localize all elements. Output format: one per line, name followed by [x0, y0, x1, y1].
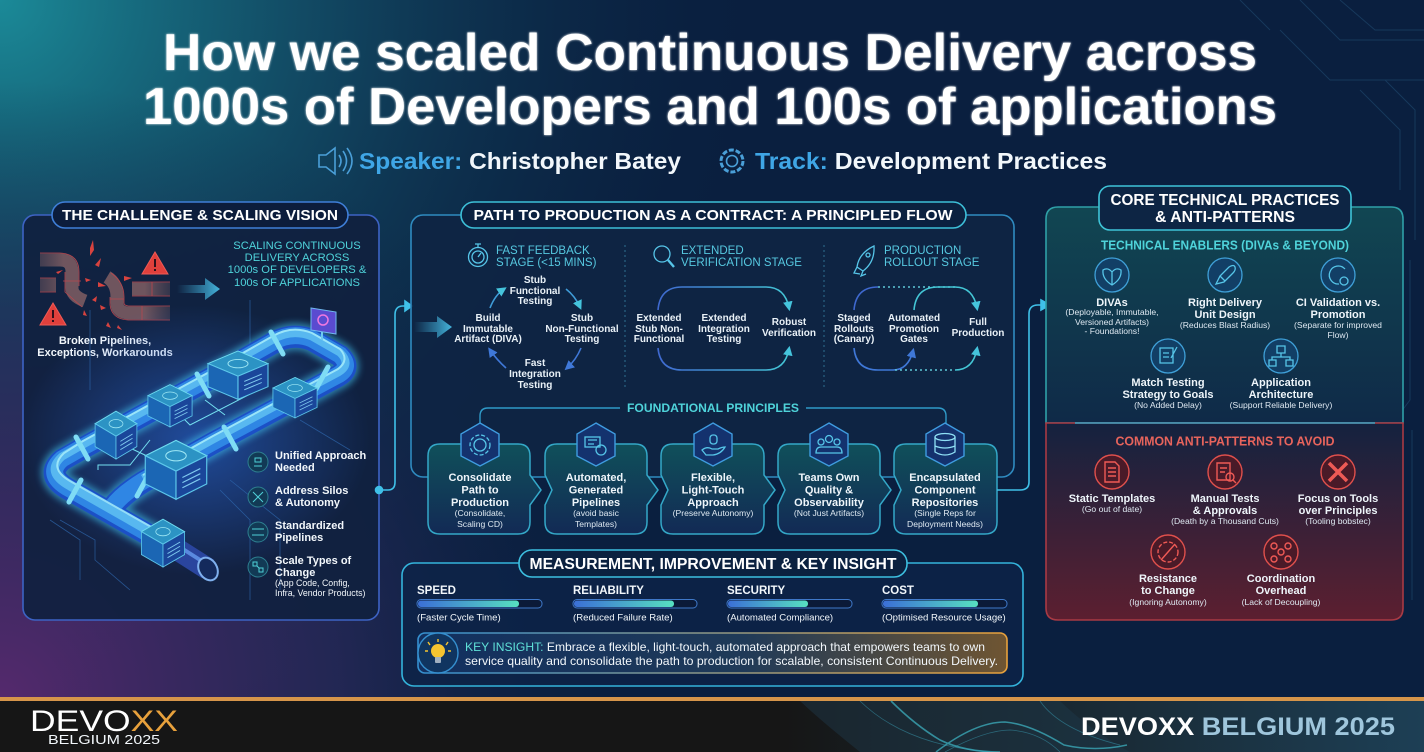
- foundational principles heading: FOUNDATIONAL PRINCIPLES: [627, 401, 799, 415]
- nodes: Build: [476, 313, 500, 324]
- nodes: Stub: [524, 275, 546, 286]
- heading: core: [1099, 186, 1351, 230]
- enabler: application architecture: Application: [1251, 377, 1311, 389]
- card: consolidate: Scaling CD): [457, 519, 503, 529]
- nodes: Fast: [525, 358, 546, 369]
- stage title: [681, 245, 802, 269]
- bullet: address silos: [248, 485, 348, 509]
- heading: challenge: THE CHALLENGE & SCALING VISION: [62, 207, 338, 224]
- enabler: match testing: (No Added Delay): [1134, 400, 1202, 410]
- nodes: Full: [969, 317, 987, 328]
- metric: reliability: (Reduced Failure Rate): [573, 612, 673, 624]
- nodes: Stub: [571, 313, 593, 324]
- anti-pattern: manual tests: [1171, 455, 1279, 526]
- scaling text: 1000s OF DEVELOPERS &: [228, 264, 367, 276]
- heading: measurement: [519, 550, 907, 577]
- cycle arrows: [490, 289, 581, 368]
- anti-pattern: tools over principles: over Principles: [1299, 505, 1377, 517]
- nodes: Testing: [707, 334, 741, 345]
- bullet: address silos: Address Silos: [275, 485, 348, 497]
- stage title: STAGE (<15 MINS): [496, 257, 597, 269]
- card: encapsulated: Repositories: [912, 497, 978, 509]
- anti-pattern: manual tests: & Approvals: [1193, 505, 1257, 517]
- card: teams own: (Not Just Artifacts): [794, 508, 864, 518]
- enabler: match testing: Strategy to Goals: [1122, 389, 1214, 401]
- anti-pattern: coordination overhead: (Lack of Decoupling): [1242, 597, 1321, 607]
- anti-pattern: resistance: Resistance: [1139, 573, 1197, 585]
- nodes: Extended: [636, 313, 682, 324]
- enabler: application architecture: (Support Reliable Delivery): [1230, 400, 1332, 410]
- bullet: standardized pipelines: Pipelines: [275, 532, 323, 544]
- footer event name: DEVOXX BELGIUM 2025: [1081, 713, 1395, 741]
- nodes: [634, 313, 816, 345]
- heading: challenge: [52, 202, 348, 228]
- heading: path: PATH TO PRODUCTION AS A CONTRACT: A PRINCIPLED FLOW: [474, 207, 953, 224]
- stage title: [496, 245, 597, 269]
- connector: principles to core practices: [997, 300, 1050, 490]
- bullet: unified approach: Unified Approach: [275, 450, 367, 462]
- anti-pattern: static templates: Static Templates: [1069, 493, 1155, 505]
- card: automated: Templates): [575, 519, 617, 529]
- wave decoration: [800, 701, 1130, 752]
- nodes: Extended: [701, 313, 747, 324]
- bullet: unified approach: Needed: [275, 462, 315, 474]
- big arrow: [414, 316, 452, 338]
- panel: path to production: [411, 202, 1014, 477]
- flow arcs: [854, 287, 977, 370]
- nodes: Gates: [900, 334, 928, 345]
- enabler: CI validation: [1294, 258, 1382, 340]
- insight text: KEY INSIGHT: Embrace a flexible, light-touch, automated approach that empowers teams to own: [465, 640, 985, 654]
- card: automated: Pipelines: [572, 497, 620, 509]
- heading: path: [461, 202, 966, 228]
- card: flexible: [661, 423, 775, 534]
- nodes: Functional: [510, 286, 560, 297]
- broken pipelines label: Broken Pipelines,: [59, 335, 151, 347]
- stage title: PRODUCTION: [884, 245, 961, 257]
- bullet: scale types of change: Scale Types of: [275, 555, 352, 567]
- card: automated: [545, 423, 658, 534]
- card: encapsulated: Component: [914, 484, 976, 496]
- illustration: pipeline: [20, 300, 370, 600]
- icon: floating status card: [311, 308, 336, 340]
- title: [143, 24, 1277, 136]
- panel: challenge and scaling vision: [20, 202, 379, 620]
- nodes: Stub Non-: [635, 324, 683, 335]
- enabler: application architecture: [1230, 339, 1332, 410]
- enabler: application architecture: Architecture: [1249, 389, 1313, 401]
- enabler: DIVAs: [1065, 258, 1159, 336]
- nodes: Automated: [888, 313, 940, 324]
- subheading: anti-patterns: COMMON ANTI-PATTERNS TO AVOID: [1116, 434, 1334, 448]
- metric: cost: [882, 585, 1007, 624]
- broken pipelines label: [37, 335, 173, 359]
- enabler: match testing: [1122, 339, 1214, 410]
- illustration: broken pipelines: [40, 240, 170, 330]
- nodes: Integration: [698, 324, 750, 335]
- enabler: right delivery unit: (Reduces Blast Radius): [1180, 320, 1270, 330]
- card: automated: (avoid basic: [573, 508, 620, 518]
- bullet: scale types of change: Change: [275, 567, 315, 579]
- logo: Devoxx Belgium 2025: DEVO XX: [30, 705, 178, 738]
- insight text: service quality and consolidate the path to production for scalable, consistent Continuous Delivery.: [465, 654, 998, 668]
- anti-pattern: tools over principles: Focus on Tools: [1298, 493, 1378, 505]
- stage: production rollout: [834, 245, 1004, 370]
- metric: security: (Automated Compliance): [727, 612, 833, 624]
- anti-pattern: manual tests: (Death by a Thousand Cuts): [1171, 516, 1279, 526]
- icon: light bulb: [425, 639, 451, 663]
- nodes: [454, 275, 619, 391]
- bullet: scale types of change: (App Code, Config,: [275, 578, 350, 588]
- icon: gear: [721, 150, 743, 172]
- card: flexible: Approach: [687, 497, 739, 509]
- nodes: [834, 313, 1004, 345]
- metric: security: [727, 585, 852, 624]
- nodes: Immutable: [463, 324, 513, 335]
- nodes: Testing: [518, 296, 552, 307]
- principle cards: [428, 423, 997, 534]
- card: automated: Generated: [569, 484, 623, 496]
- metric: speed: [417, 585, 542, 624]
- nodes: Rollouts: [834, 324, 874, 335]
- stage title: EXTENDED: [681, 245, 744, 257]
- enabler: match testing: Match Testing: [1131, 377, 1205, 389]
- subheading: technical enablers: TECHNICAL ENABLERS (DIVAs & BEYOND): [1101, 238, 1349, 252]
- nodes: Integration: [509, 369, 561, 380]
- insight text: [465, 640, 998, 668]
- stage: extended verification: [634, 245, 816, 370]
- card: teams own: [778, 423, 891, 534]
- nodes: Testing: [565, 334, 599, 345]
- icon: speaker: [319, 148, 352, 174]
- bullet: standardized pipelines: [248, 520, 344, 544]
- nodes: Non-Functional: [545, 324, 619, 335]
- speaker line: [319, 148, 681, 174]
- stage title: ROLLOUT STAGE: [884, 257, 980, 269]
- scaling text: SCALING CONTINUOUS: [233, 240, 361, 252]
- metric: reliability: [573, 585, 697, 624]
- enabler: CI validation: Flow): [1327, 330, 1349, 340]
- card: encapsulated: [894, 423, 997, 534]
- card: encapsulated: (Single Reps for: [914, 508, 976, 518]
- flow arcs: [658, 287, 789, 370]
- card: flexible: Light-Touch: [682, 484, 745, 496]
- card: consolidate: Consolidate: [449, 472, 511, 484]
- track text: Track: Development Practices: [755, 148, 1107, 174]
- heading: measurement: MEASUREMENT, IMPROVEMENT & KEY INSIGHT: [530, 556, 897, 573]
- panel: core technical practices: [1046, 186, 1403, 620]
- anti-pattern: manual tests: Manual Tests: [1191, 493, 1259, 505]
- heading: core: & ANTI-PATTERNS: [1155, 209, 1295, 226]
- stage title: VERIFICATION STAGE: [681, 257, 802, 269]
- stage title: [884, 245, 980, 269]
- scaling text: [228, 240, 367, 289]
- nodes: Functional: [634, 334, 684, 345]
- nodes: Artifact (DIVA): [454, 334, 522, 345]
- callout: key insight: [418, 633, 1007, 673]
- enabler: CI validation: Promotion: [1310, 309, 1366, 321]
- card: teams own: Quality &: [805, 484, 853, 496]
- anti-pattern: resistance: to Change: [1141, 585, 1195, 597]
- nodes: (Canary): [834, 334, 874, 345]
- title: 1000s of Developers and 100s of applications: [143, 78, 1277, 136]
- nodes: Testing: [518, 380, 552, 391]
- metric: cost: COST: [882, 585, 914, 597]
- metric: speed: (Faster Cycle Time): [417, 612, 501, 624]
- enabler: DIVAs: (Deployable, Immutable,: [1065, 307, 1159, 317]
- anti-pattern: tools over principles: [1298, 455, 1378, 526]
- arrow: [177, 278, 220, 300]
- pipe collars: [69, 332, 328, 502]
- panel: measurement: [402, 550, 1023, 686]
- connector: challenge to path: [376, 301, 412, 494]
- track line: [721, 148, 1107, 174]
- stage: fast feedback: [414, 244, 619, 391]
- card: consolidate: [428, 423, 541, 534]
- enabler: right delivery unit: [1180, 258, 1270, 330]
- metric: reliability: RELIABILITY: [573, 585, 644, 597]
- nodes: Promotion: [889, 324, 939, 335]
- card: flexible: (Preserve Autonomy): [673, 508, 753, 518]
- anti-pattern: resistance: (Ignoring Autonomy): [1129, 597, 1207, 607]
- logo: Devoxx Belgium 2025: BELGIUM 2025: [48, 732, 160, 747]
- enabler: right delivery unit: Unit Design: [1194, 309, 1256, 321]
- anti-pattern: tools over principles: (Tooling bobstec): [1305, 516, 1371, 526]
- nodes: Robust: [772, 317, 807, 328]
- icon: rocket: [854, 246, 874, 276]
- anti-pattern: static templates: [1069, 455, 1155, 514]
- metric: security: SECURITY: [727, 585, 785, 597]
- anti-pattern: resistance: [1129, 535, 1207, 607]
- bullet: scale types of change: Infra, Vendor Products): [275, 588, 366, 598]
- card: teams own: Observability: [794, 497, 865, 509]
- enabler: DIVAs: DIVAs: [1096, 297, 1128, 309]
- broken pipelines label: Exceptions, Workarounds: [37, 347, 173, 359]
- nodes: Staged: [837, 313, 871, 324]
- heading: core: CORE TECHNICAL PRACTICES: [1110, 192, 1340, 209]
- bullet: unified approach: [248, 450, 367, 474]
- card: consolidate: Production: [451, 497, 509, 509]
- card: teams own: Teams Own: [799, 472, 860, 484]
- icon: warning bottom: [40, 303, 66, 325]
- scaling text: DELIVERY ACROSS: [245, 252, 349, 264]
- anti-pattern: coordination overhead: [1242, 535, 1321, 607]
- enabler: CI validation: (Separate for improved: [1294, 320, 1382, 330]
- card: consolidate: (Consolidate,: [455, 508, 505, 518]
- card: encapsulated: Deployment Needs): [907, 519, 983, 529]
- icon: warning top: [142, 252, 168, 274]
- enabler: right delivery unit: Right Delivery: [1188, 297, 1263, 309]
- bullet: address silos: & Autonomy: [275, 497, 341, 509]
- bullet: standardized pipelines: Standardized: [275, 520, 344, 532]
- footer: [0, 697, 1424, 752]
- card: consolidate: Path to: [461, 484, 499, 496]
- anti-pattern: coordination overhead: Coordination: [1247, 573, 1315, 585]
- scaling text: 100s OF APPLICATIONS: [234, 277, 360, 289]
- stage title: FAST FEEDBACK: [496, 245, 590, 257]
- enabler: DIVAs: Versioned Artifacts): [1075, 317, 1149, 327]
- nodes: Verification: [762, 328, 816, 339]
- bullet: scale types of change: [248, 555, 366, 598]
- metric: cost: (Optimised Resource Usage): [882, 612, 1006, 624]
- title: How we scaled Continuous Delivery across: [163, 24, 1257, 82]
- anti-pattern: static templates: (Go out of date): [1082, 504, 1142, 514]
- outlet pipe: [175, 544, 222, 584]
- metric: speed: SPEED: [417, 585, 456, 597]
- enabler: CI validation: CI Validation vs.: [1296, 297, 1380, 309]
- card: flexible: Flexible,: [691, 472, 735, 484]
- speaker text: Speaker: Christopher Batey: [359, 148, 681, 174]
- nodes: Production: [952, 328, 1004, 339]
- card: encapsulated: Encapsulated: [909, 472, 981, 484]
- anti-pattern: coordination overhead: Overhead: [1256, 585, 1306, 597]
- icon: stopwatch: [468, 244, 488, 266]
- enabler: DIVAs: - Foundations!: [1085, 326, 1139, 336]
- card: automated: Automated,: [566, 472, 626, 484]
- icon: magnifier: [654, 246, 674, 267]
